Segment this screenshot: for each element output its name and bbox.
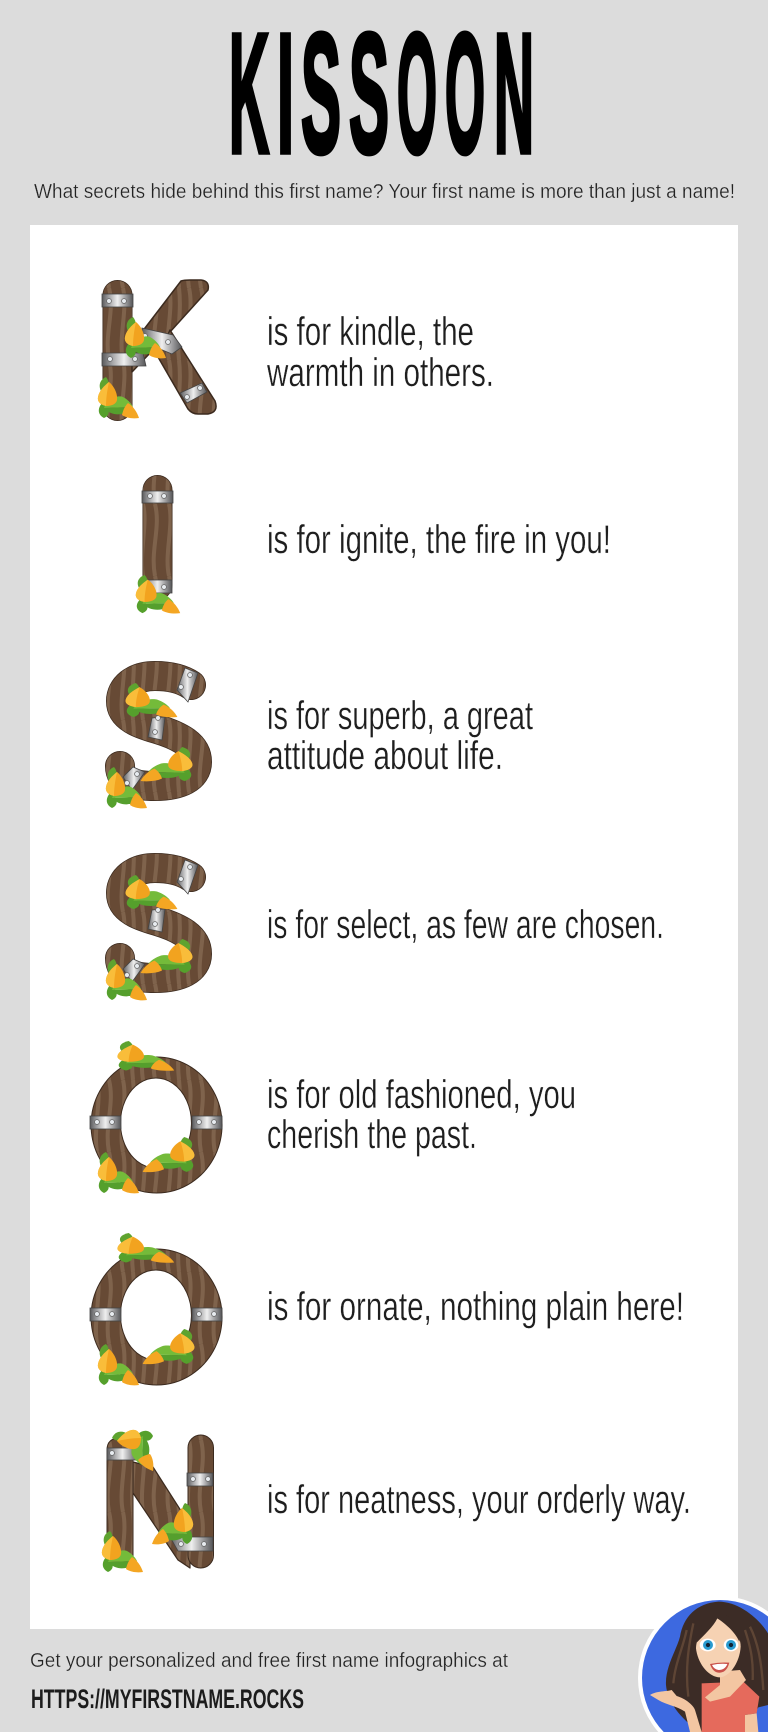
text: I line: is for ignite, the fire in you!: [267, 518, 611, 562]
text: K line: warmth in others.: [266, 351, 494, 395]
row: I: [136, 490, 611, 613]
text: K line: is for kindle, the: [267, 310, 474, 354]
text: N: [494, 0, 534, 189]
text: S line: is for superb, a great: [267, 694, 533, 738]
text: K line: [266, 310, 494, 395]
icon: wooden letter K: [98, 280, 216, 418]
row: O second: [90, 1233, 684, 1385]
icon: wooden letter O: [90, 1233, 222, 1385]
title: O: [445, 0, 485, 189]
title: I: [277, 0, 294, 189]
text: O line: cherish the past.: [267, 1113, 477, 1157]
icon: wooden letter N: [102, 1430, 214, 1572]
footer url: HTTPS://MYFIRSTNAME.ROCKS: [31, 1684, 304, 1714]
row: O first: [90, 1041, 576, 1193]
text: O line: is for old fashioned, you: [267, 1073, 576, 1117]
subtitle: What secrets hide behind this first name? Your first name is more than just a name!: [34, 181, 735, 203]
icon: avatar in circle: [638, 1596, 768, 1732]
title: O: [397, 0, 437, 189]
row: S second: [106, 860, 664, 1000]
panel: letters card: [30, 225, 738, 1629]
title: S: [349, 0, 389, 189]
text: S line: attitude about life.: [267, 734, 503, 778]
text: O line: [267, 1073, 576, 1157]
icon: wooden letter O: [90, 1041, 222, 1193]
row: N: [102, 1430, 691, 1572]
row: K: [98, 280, 494, 418]
icon: wooden letter S: [106, 860, 198, 1000]
footer text: Get your personalized and free first name infographics at: [30, 1650, 508, 1672]
row: S first: [106, 668, 533, 808]
icon: wooden letter I: [136, 490, 180, 613]
title: K: [229, 0, 269, 189]
text: S line: [267, 694, 533, 778]
icon: wooden letter S: [106, 668, 198, 808]
title: S: [301, 0, 341, 189]
